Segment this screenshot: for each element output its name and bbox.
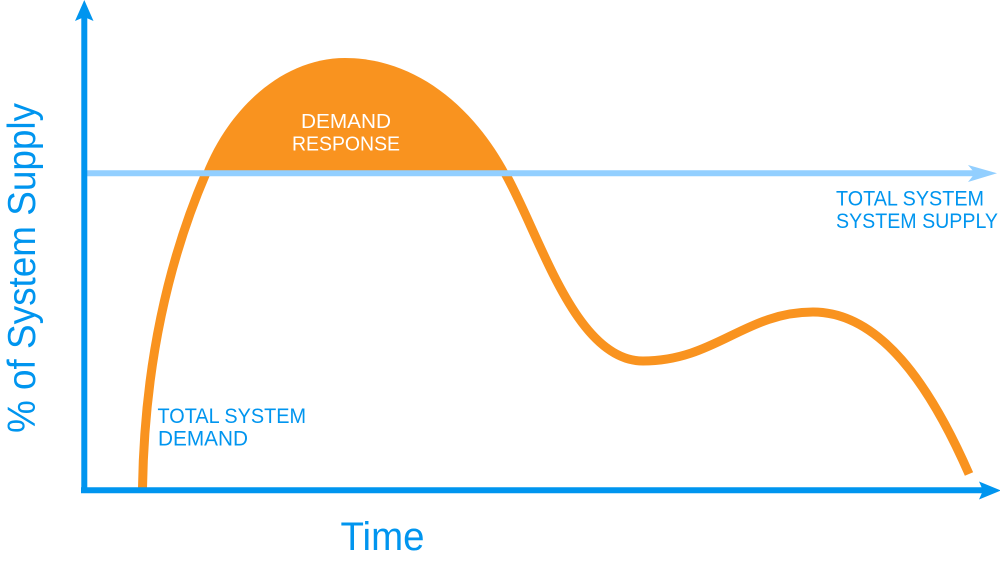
demand response label: RESPONSE: [292, 132, 400, 156]
total system demand curve: [142, 173, 969, 488]
demand response label: DEMAND: [301, 110, 391, 133]
total system supply arrow: [85, 165, 997, 182]
total system supply label: TOTAL SYSTEM: [836, 188, 984, 210]
total system demand label: DEMAND: [158, 428, 248, 450]
demand response filled area: [203, 58, 509, 173]
x axis title: Time: [340, 515, 424, 559]
x axis arrow: [81, 482, 1000, 500]
y axis arrow: [75, 0, 94, 493]
y axis title: % of System Supply: [1, 103, 44, 433]
total system demand label: TOTAL SYSTEM: [158, 405, 306, 428]
